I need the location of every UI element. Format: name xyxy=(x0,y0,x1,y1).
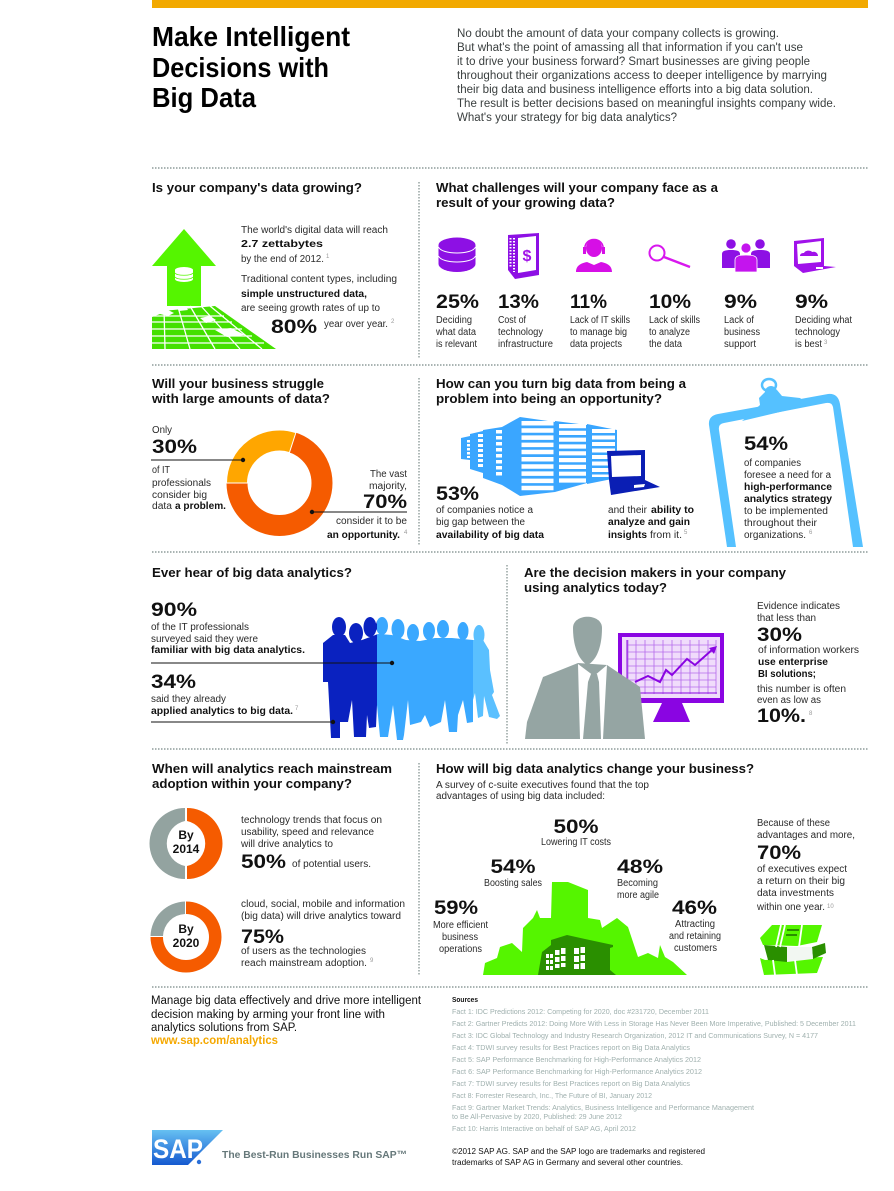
heading: How will big data analytics change your business? xyxy=(436,761,754,776)
tagline: The Best-Run Businesses Run SAP™ xyxy=(222,1149,407,1161)
panel: ever hear of big data analytics xyxy=(151,565,503,745)
icon: businessman xyxy=(525,617,645,739)
icon: building with dollar: $ xyxy=(523,248,532,265)
stat: 54% boosting sales xyxy=(484,856,542,889)
stat: 48% becoming more agile: Becoming xyxy=(617,878,658,889)
text: 2.7 zettabytes xyxy=(241,225,388,265)
stat: 9% deciding technology: Deciding what xyxy=(795,315,852,326)
stat: 25%: what data xyxy=(435,327,476,338)
stat: 46% attracting customers: 46% xyxy=(672,897,717,919)
icon: database xyxy=(438,238,476,272)
stat: 13%: technology xyxy=(498,327,543,338)
icon: magnifier xyxy=(650,246,690,267)
stat: 90%: familiar with big data analytics. xyxy=(151,645,305,656)
sources: Fact 6: SAP Performance Benchmarking for High-Performance Analytics 2012 xyxy=(452,1067,702,1076)
heading: When will analytics reach mainstream xyxy=(152,761,392,776)
text: 30% and 10% xyxy=(757,601,859,727)
text: 30% and 10%: 8 xyxy=(809,711,813,717)
sources: Fact 9: Gartner Market Trends: Analytics, Business Intelligence and Performance Management xyxy=(452,1103,755,1112)
stat: 25%: Deciding xyxy=(436,315,472,326)
text: ability to analyze: insights xyxy=(608,530,647,541)
stat: 25% xyxy=(435,291,479,350)
donut chart: by 2014 xyxy=(150,808,222,879)
stat: 70% of executives: advantages and more, xyxy=(757,830,855,841)
stat: 11% xyxy=(570,291,630,350)
icon: headset person xyxy=(576,239,612,272)
title: Decisions with xyxy=(152,52,329,83)
icon: people group xyxy=(722,239,770,272)
callout: 70%: 4 xyxy=(404,530,408,536)
stat: 10% xyxy=(649,291,700,350)
text: 30% and 10%: Evidence indicates xyxy=(757,601,840,612)
stat: 9% deciding technology xyxy=(795,291,852,350)
stat: 11%: to manage big xyxy=(570,327,627,338)
text: 2.7 zettabytes: The world's digital data will reach xyxy=(241,225,388,236)
donut chart: 30% vs 70% xyxy=(226,430,322,526)
stat: 50% lowering IT costs: Lowering IT costs xyxy=(541,837,611,848)
callout: 70% xyxy=(310,469,408,541)
sources: Fact 4: TDWI survey results for Best Practices report on Big Data Analytics xyxy=(452,1043,690,1052)
stat: 10%: to analyze xyxy=(649,327,690,338)
stat: 54%: high-performance xyxy=(744,482,832,493)
stat: 54%: throughout their xyxy=(744,518,818,529)
stat: 34% xyxy=(151,671,335,724)
heading: How can you turn big data from being a xyxy=(436,376,687,391)
stat: 9% deciding technology: technology xyxy=(795,327,840,338)
text: 30% and 10%: BI solutions; xyxy=(758,669,816,680)
sources: Sources xyxy=(452,995,478,1004)
stat: 48% becoming more agile xyxy=(617,856,663,901)
stat: 50% lowering IT costs: 50% xyxy=(554,816,598,838)
stat: 54%: organizations. xyxy=(744,530,806,541)
title xyxy=(152,21,350,113)
text: ability to analyze xyxy=(608,505,694,541)
text: content growth 80%: simple unstructured data, xyxy=(241,289,367,300)
stat: 10%: Lack of skills xyxy=(649,315,700,326)
stat: 46% attracting customers xyxy=(669,897,721,954)
heading: Ever hear of big data analytics? xyxy=(152,565,352,580)
intro text block: But what's the point of amassing all that information if you can't use xyxy=(457,42,803,54)
text: 30% and 10%: of information workers xyxy=(758,645,859,656)
copyright xyxy=(452,1147,705,1167)
stat: 11%: 11% xyxy=(570,291,607,313)
text: 30% and 10%: 30% xyxy=(757,624,802,646)
stat: 53%: big gap between the xyxy=(436,517,525,528)
stat: 34%: 34% xyxy=(151,671,196,693)
sources: Fact 2: Gartner Predicts 2012: Doing More With Less in Storage Has Never Been More Imperative, Published: 5 December 2011 xyxy=(452,1019,856,1028)
sources: Fact 1: IDC Predictions 2012: Competing for 2020, doc #231720, December 2011 xyxy=(452,1007,709,1016)
heading: problem into being an opportunity? xyxy=(436,391,662,406)
stat: 90%: of the IT professionals xyxy=(151,622,249,633)
callout: 70%: consider it to be xyxy=(336,516,407,527)
stat: 54%: analytics strategy xyxy=(744,494,832,505)
panel: mainstream adoption xyxy=(150,761,405,972)
intro text: advantages of using big data included: xyxy=(436,791,605,802)
stat: 34%: said they already xyxy=(151,694,226,705)
stat: 53% xyxy=(436,483,544,541)
callout: 30%: Only xyxy=(152,425,172,436)
sources xyxy=(452,995,856,1133)
callout: 30%: a problem. xyxy=(175,501,226,512)
stat: 54%: foresee a need for a xyxy=(744,470,831,481)
stat: 70% of executives: data investments xyxy=(757,888,834,899)
text: content growth 80%: 80% xyxy=(271,316,317,338)
stat: 9% business support: 9% xyxy=(724,291,757,313)
stat: 25%: is relevant xyxy=(436,339,477,350)
stat: 59% more efficient operations: business xyxy=(442,932,478,943)
text: content growth 80%: 2 xyxy=(391,319,395,325)
sources: Fact 10: Harris Interactive on behalf of SAP AG, April 2012 xyxy=(452,1124,636,1133)
callout: 30%: 30% xyxy=(152,436,197,458)
icon: green arrow with database xyxy=(152,229,216,306)
icon: laptop with cloud xyxy=(794,238,836,273)
stat: 34%: applied analytics to big data. xyxy=(151,706,293,717)
text: content growth 80%: Traditional content types, including xyxy=(241,274,397,285)
donut chart: by 2014: By xyxy=(178,828,194,842)
stat: 9% business support: Lack of xyxy=(724,315,754,326)
sources: Fact 3: IDC Global Technology and Industry Research Organization, 2012 IT and Communications Survey, N = 4177 xyxy=(452,1031,818,1040)
illustration: green city skyline xyxy=(483,882,687,975)
stat: 9% deciding technology: is best xyxy=(795,339,822,350)
stat: 90%: 90% xyxy=(151,599,197,621)
text: 75% of users xyxy=(241,899,405,969)
icon: clipboard xyxy=(709,379,863,547)
text: 50% of potential users: of potential users. xyxy=(292,859,371,870)
text: 75% of users: cloud, social, mobile and information xyxy=(241,899,405,910)
stat: 46% attracting customers: and retaining xyxy=(669,931,721,942)
illustration: crowd silhouettes xyxy=(323,617,500,740)
text: 30% and 10%: even as low as xyxy=(757,695,821,706)
stat: 59% more efficient operations: More efficient xyxy=(433,920,488,931)
text: 50% of potential users: technology trends that focus on xyxy=(241,815,382,826)
callout: 30%: data xyxy=(152,501,172,512)
icon: money stack xyxy=(760,925,826,975)
intro text block xyxy=(457,28,836,124)
intro text block: No doubt the amount of data your company collects is growing. xyxy=(457,28,779,40)
text: 2.7 zettabytes: 1 xyxy=(326,254,330,260)
stat: 53%: availability of big data xyxy=(436,530,544,541)
text: ability to analyze: 5 xyxy=(684,530,688,536)
callout: 70%: The vast xyxy=(370,469,407,480)
title: Big Data xyxy=(152,82,256,113)
stat: 48% becoming more agile: 48% xyxy=(617,856,663,878)
stat: 70% of executives: 10 xyxy=(827,904,834,910)
text: content growth 80%: are seeing growth rates of up to xyxy=(241,303,380,314)
text: 75% of users: reach mainstream adoption. xyxy=(241,958,367,969)
sources: Fact 7: TDWI survey results for Best Practices report on Big Data Analytics xyxy=(452,1079,690,1088)
stat: 13%: Cost of xyxy=(498,315,526,326)
heading: using analytics today? xyxy=(524,580,667,595)
stat: 10%: 10% xyxy=(649,291,691,313)
title: Make Intelligent xyxy=(152,21,350,52)
stat: 53%: 53% xyxy=(436,483,479,505)
SAP logo: SAP xyxy=(153,1134,203,1164)
text: 30% and 10%: that less than xyxy=(757,613,816,624)
heading: Will your business struggle xyxy=(152,376,324,391)
callout: 70%: majority, xyxy=(369,481,407,492)
stat: 25%: 25% xyxy=(436,291,479,313)
stat: 90% xyxy=(151,599,394,665)
stat: 54% boosting sales: 54% xyxy=(490,856,536,878)
text: ability to analyze: from it. xyxy=(650,530,682,541)
heading xyxy=(436,376,687,406)
intro text xyxy=(436,780,649,802)
stat: 9% business support: business xyxy=(724,327,760,338)
text: 75% of users: 9 xyxy=(370,958,374,964)
stat: 70% of executives: a return on their big xyxy=(757,876,845,887)
panel: challenges xyxy=(435,180,852,350)
stat: 90%: surveyed said they were xyxy=(151,634,258,645)
stat: 59% more efficient operations: 59% xyxy=(434,897,478,919)
heading: with large amounts of data? xyxy=(151,391,330,406)
callout: 30%: of IT xyxy=(152,465,170,476)
stat: 53%: of companies notice a xyxy=(436,505,533,516)
text: 30% and 10%: this number is often xyxy=(757,684,846,695)
panel: how will big data analytics change your business xyxy=(433,761,855,975)
heading xyxy=(524,565,787,595)
callout: 70%: 70% xyxy=(363,491,407,513)
stat: 9% deciding technology: 3 xyxy=(824,340,828,346)
copyright: trademarks of SAP AG in Germany and several other countries. xyxy=(452,1158,683,1167)
heading: Are the decision makers in your company xyxy=(524,565,787,580)
stat: 59% more efficient operations xyxy=(433,897,488,955)
donut chart: by 2020: By xyxy=(178,922,194,936)
donut chart: by 2020: 2020 xyxy=(173,936,200,950)
text: 50% of potential users: 50% xyxy=(241,851,286,873)
stat: 11%: Lack of IT skills xyxy=(570,315,630,326)
heading: result of your growing data? xyxy=(436,195,615,210)
text: 75% of users: (big data) will drive analytics toward xyxy=(241,911,401,922)
stat: 10%: the data xyxy=(649,339,682,350)
heading: What challenges will your company face as a xyxy=(436,180,719,195)
callout: 30%: consider big xyxy=(152,490,207,501)
intro text block: What's your strategy for big data analytics? xyxy=(457,112,677,124)
intro text block: throughout their organizations access to deeper intelligence by marrying xyxy=(457,70,827,82)
text: content growth 80%: year over year. xyxy=(324,319,388,330)
stat: 54% xyxy=(744,433,832,541)
stat: 9% business support xyxy=(724,291,760,350)
copyright: ©2012 SAP AG. SAP and the SAP logo are trademarks and registered xyxy=(452,1147,705,1156)
intro text block: The result is better decisions based on meaningful insights company wide. xyxy=(457,98,836,110)
sources: Fact 8: Forrester Research, Inc., The Future of BI, January 2012 xyxy=(452,1091,652,1100)
stat: 70% of executives: of executives expect xyxy=(757,864,847,875)
icon: laptop xyxy=(607,450,660,495)
stat: 70% of executives: within one year. xyxy=(756,902,825,913)
heading xyxy=(151,376,330,406)
donut chart: by 2014: 2014 xyxy=(173,842,200,856)
text: 50% of potential users: will drive analytics to xyxy=(240,839,333,850)
panel: decision makers using analytics xyxy=(524,565,859,739)
call to action: www.sap.com/analytics xyxy=(150,1035,278,1047)
text: content growth 80% xyxy=(241,274,397,338)
SAP logo xyxy=(152,1130,223,1165)
stat: 54% boosting sales: Boosting sales xyxy=(484,878,542,889)
text: 50% of potential users: usability, speed and relevance xyxy=(241,827,374,838)
intro text: A survey of c-suite executives found that the top xyxy=(436,780,649,791)
text: 50% of potential users xyxy=(240,815,382,873)
stat: 13%: infrastructure xyxy=(498,339,553,350)
stat: 70% of executives: Because of these xyxy=(757,818,830,829)
stat: 70% of executives xyxy=(756,818,855,913)
stat: 9% business support: support xyxy=(724,339,756,350)
stat: 9% deciding technology: 9% xyxy=(795,291,828,313)
stat: 46% attracting customers: customers xyxy=(674,943,717,954)
call to action: analytics solutions from SAP. xyxy=(151,1022,297,1034)
stat: 48% becoming more agile: more agile xyxy=(617,890,659,901)
call to action xyxy=(150,995,422,1047)
callout: 30% xyxy=(151,425,245,512)
heading xyxy=(436,180,719,210)
heading xyxy=(152,761,392,791)
stat: 13% xyxy=(498,291,553,350)
text: ability to analyze: and their xyxy=(608,505,648,516)
stat: 13%: 13% xyxy=(498,291,539,313)
panel: will your business struggle xyxy=(151,376,408,541)
stat: 59% more efficient operations: operations xyxy=(439,944,482,955)
icon: map grid xyxy=(152,306,276,349)
call to action: decision making by arming your front line with xyxy=(151,1009,385,1021)
stat: 70% of executives: 70% xyxy=(757,842,801,864)
stat: 54%: 54% xyxy=(744,433,788,455)
callout: 30%: professionals xyxy=(152,478,211,489)
text: 75% of users: of users as the technologies xyxy=(241,946,366,957)
intro text block: their big data and business intelligence efforts into a big data solution. xyxy=(457,84,813,96)
heading: Is your company's data growing? xyxy=(152,180,362,195)
panel: is your company's data growing xyxy=(152,180,397,349)
stat: 54%: 6 xyxy=(809,530,813,536)
stat: 54%: to be implemented xyxy=(744,506,828,517)
icon: server racks xyxy=(461,417,617,496)
text: 2.7 zettabytes: by the end of 2012. xyxy=(241,254,324,265)
text: ability to analyze: ability to xyxy=(651,505,694,516)
stat: 11%: data projects xyxy=(570,339,622,350)
icon: monitor with line chart xyxy=(618,633,724,722)
call to action: Manage big data effectively and drive more intelligent xyxy=(151,995,422,1007)
text: ability to analyze: analyze and gain xyxy=(608,517,690,528)
sources: Fact 5: SAP Performance Benchmarking for High-Performance Analytics 2012 xyxy=(452,1055,701,1064)
stat: 50% lowering IT costs xyxy=(541,816,611,848)
donut chart: by 2020 xyxy=(150,902,222,972)
icon: building with dollar xyxy=(508,233,539,279)
stat: 54%: of companies xyxy=(744,458,801,469)
sources: to Be All-Pervasive by 2020, Published: 29 June 2012 xyxy=(452,1112,622,1121)
heading: adoption within your company? xyxy=(152,776,352,791)
panel: problem into opportunity xyxy=(436,376,863,547)
text: 30% and 10%: 10%. xyxy=(757,705,806,727)
text: 30% and 10%: use enterprise xyxy=(758,657,828,668)
text: 75% of users: 75% xyxy=(241,926,284,948)
stat: 46% attracting customers: Attracting xyxy=(675,919,715,930)
callout: 70%: an opportunity. xyxy=(327,530,400,541)
intro text block: it to drive your business forward? Smart businesses are giving people xyxy=(457,56,810,68)
stat: 34%: 7 xyxy=(295,706,299,712)
text: 2.7 zettabytes: 2.7 zettabytes xyxy=(241,239,324,250)
